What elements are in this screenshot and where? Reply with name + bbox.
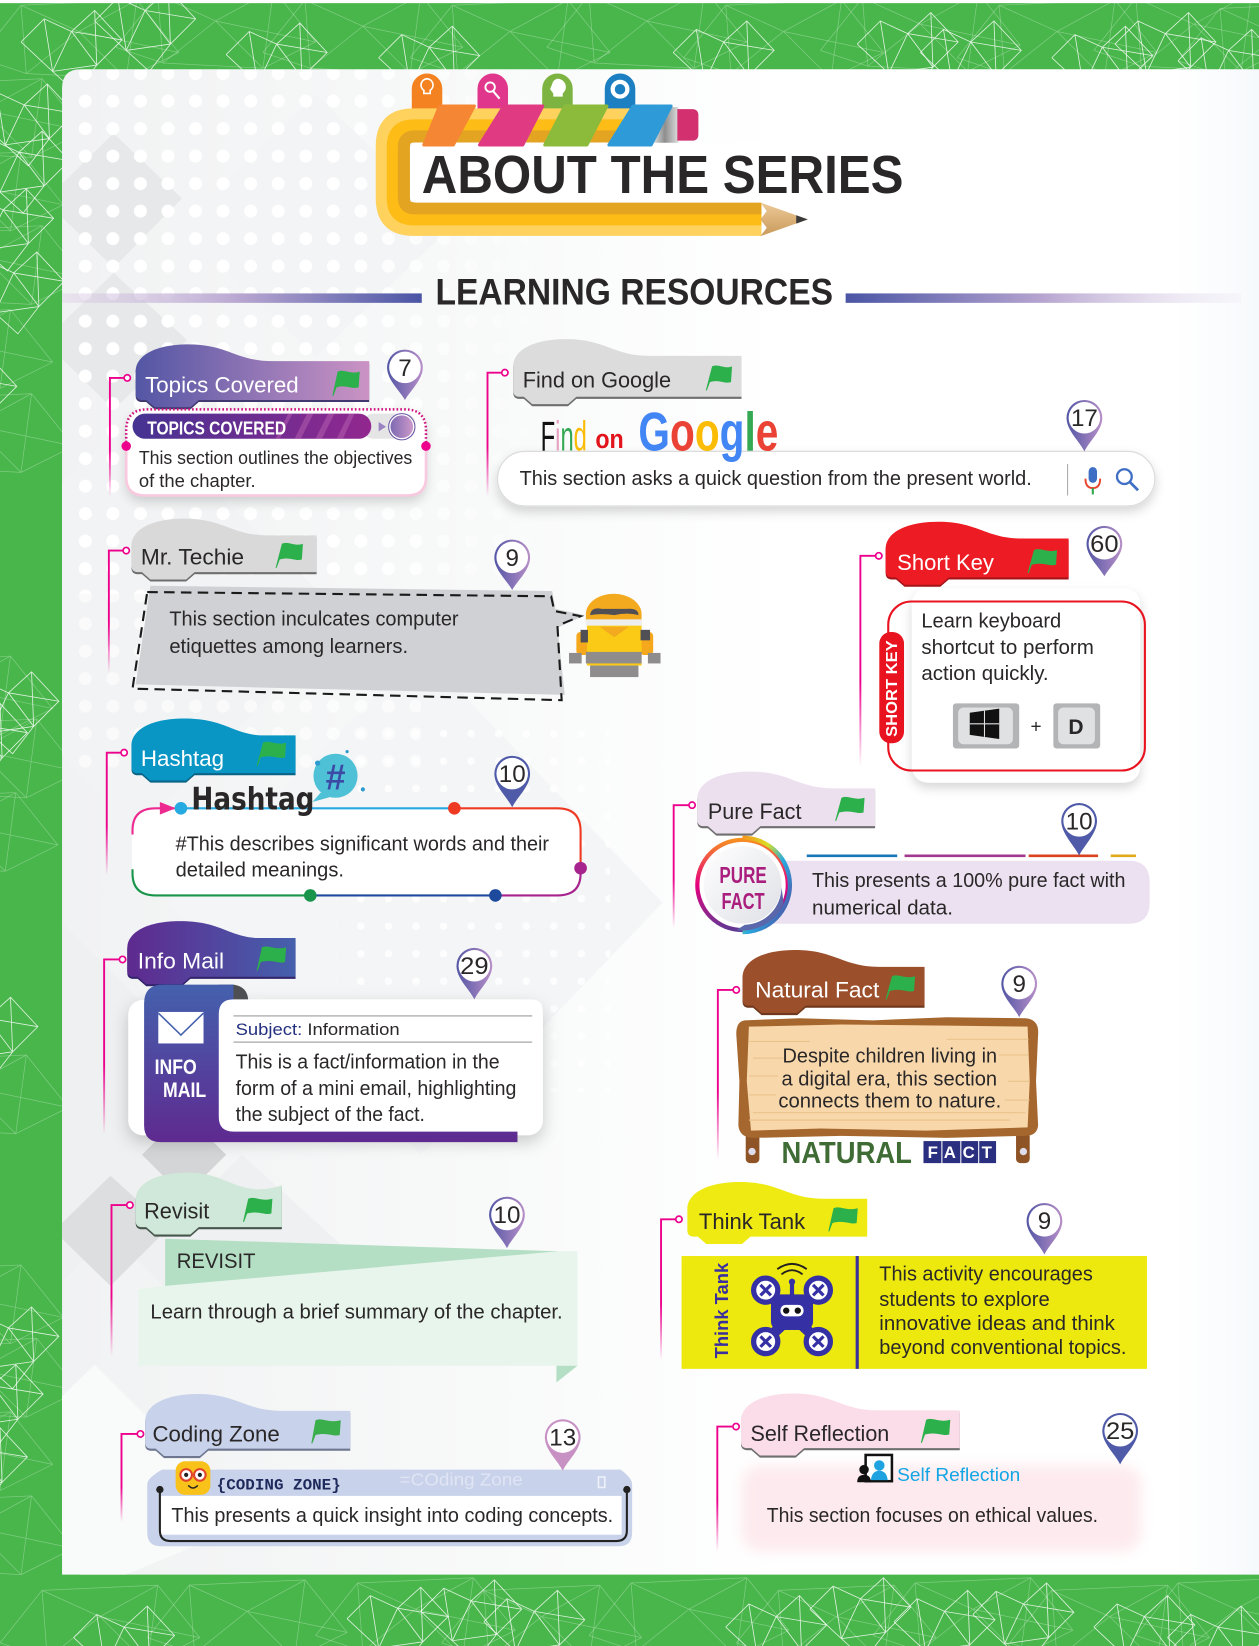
- title bar: TOPICS COVERED: [147, 419, 286, 440]
- find on google logo: on: [595, 424, 624, 454]
- pin 60: 60: [1090, 531, 1119, 558]
- self reflection logo: Self Reflection: [897, 1465, 1020, 1486]
- connector: [860, 553, 882, 766]
- tab: [131, 719, 296, 783]
- find on google logo: Find: [541, 412, 587, 459]
- heading: learning resources: [62, 271, 1241, 312]
- panel: coding zone: [121, 1394, 632, 1546]
- title: pencil banner: [382, 73, 915, 236]
- icon tabs above the pencil: [412, 73, 635, 111]
- tab: Think Tank: [699, 1209, 806, 1234]
- mail card: the subject of the fact.: [236, 1104, 425, 1126]
- find on google logo: Google: [638, 401, 778, 462]
- panel: find on google: [488, 339, 1155, 506]
- connector: [104, 956, 126, 1135]
- tab: [145, 1394, 350, 1458]
- top white strip: [0, 0, 1259, 3]
- pin 13: [545, 1419, 581, 1471]
- tab: Topics Covered: [145, 373, 299, 398]
- content box: [121, 409, 431, 497]
- code frame: =COding Zone: [400, 1469, 523, 1489]
- pin 10: [489, 1197, 525, 1248]
- code frame: {CODING ZONE}: [217, 1477, 341, 1495]
- coloured rule segments: [807, 854, 1136, 857]
- sign posts: [746, 1132, 1030, 1163]
- pin 9: [1027, 1203, 1062, 1254]
- callout box: This section inculcates computer: [169, 609, 459, 631]
- pin 7: 7: [398, 355, 412, 382]
- pure fact badge: PURE: [719, 862, 767, 888]
- heading: learning resources: LEARNING RESOURCES: [435, 271, 833, 312]
- background diamonds and dots: [62, 69, 1115, 1575]
- panel: mr. techie: [109, 519, 661, 700]
- connector: [674, 802, 695, 928]
- wooden sign: [736, 1017, 1038, 1163]
- mail card: Subject: Information: [236, 1020, 400, 1039]
- keyboard keys: [953, 703, 1100, 748]
- panel: topics covered: [110, 344, 431, 497]
- pin 29: 29: [460, 953, 489, 980]
- search bar: [497, 451, 1155, 506]
- description: This section focuses on ethical values.: [767, 1505, 1098, 1527]
- tab: Coding Zone: [153, 1421, 280, 1446]
- pin 17: 17: [1071, 405, 1098, 432]
- panel: pure fact: [674, 772, 1150, 932]
- summary box: Learn through a brief summary of the chapter.: [150, 1301, 563, 1323]
- pin 10: [494, 756, 530, 807]
- activity box: [682, 1256, 1147, 1369]
- coloured ribbons: [424, 106, 671, 145]
- icon: magnifier: [1117, 469, 1138, 490]
- panel: hashtag: [107, 719, 587, 902]
- natural fact logo: NATURAL: [781, 1136, 912, 1170]
- hashtag logo: #: [326, 757, 346, 797]
- tab: Pure Fact: [708, 799, 801, 824]
- hashtag logo: Hashtag: [191, 781, 314, 817]
- pencil tip: [760, 203, 808, 236]
- pin 9: 9: [1012, 971, 1026, 998]
- tab: [131, 519, 317, 582]
- pin 9: 9: [505, 545, 519, 572]
- keyboard keys: +: [1030, 717, 1042, 738]
- icon: coder face: [176, 1461, 210, 1495]
- tab: Mr. Techie: [141, 545, 244, 570]
- pure fact badge: [695, 838, 790, 932]
- natural fact logo: [781, 1136, 996, 1170]
- activity box: students to explore: [879, 1289, 1050, 1311]
- panel: short key: [860, 522, 1145, 783]
- search bar: This section asks a quick question from the present world.: [520, 468, 1032, 490]
- pin 9: 9: [1038, 1208, 1051, 1235]
- pin 9: [1001, 966, 1037, 1017]
- pin 9: [494, 540, 530, 590]
- pin 25: [1102, 1413, 1138, 1464]
- vertical label: [879, 632, 904, 743]
- tab: [741, 1394, 960, 1458]
- connector: [488, 370, 508, 497]
- tab: Find on Google: [523, 367, 671, 392]
- callout box: [133, 586, 585, 700]
- connector: [110, 375, 130, 497]
- activity box: Think Tank: [712, 1262, 733, 1358]
- tab: [743, 950, 925, 1015]
- panel: info mail: [104, 921, 543, 1142]
- tab: Natural Fact: [755, 977, 879, 1002]
- content card: Learn keyboard: [921, 611, 1061, 633]
- mail card: form of a mini email, highlighting: [236, 1078, 516, 1100]
- icon: envelope: [158, 1012, 204, 1043]
- panel: self reflection: [717, 1394, 1141, 1552]
- keyboard keys: D: [1068, 716, 1084, 739]
- tab: Short Key: [897, 550, 994, 575]
- content box: This section outlines the objectives: [139, 447, 412, 468]
- mail card: [128, 985, 543, 1142]
- code frame: This presents a quick insight into coding concepts.: [171, 1505, 613, 1527]
- summary box: REVISIT: [177, 1250, 256, 1273]
- pill: This presents a 100% pure fact with: [812, 870, 1125, 892]
- tab: [697, 772, 875, 836]
- wooden sign: connects them to nature.: [778, 1090, 1001, 1112]
- self reflection logo: [857, 1455, 1020, 1486]
- pencil eraser: [651, 107, 698, 143]
- tab: Hashtag: [141, 746, 224, 771]
- connector: [717, 1423, 739, 1552]
- connector: [661, 1216, 682, 1360]
- icon: microphone: [1085, 467, 1100, 494]
- tab: [687, 1182, 867, 1244]
- vertical label: SHORT KEY: [884, 640, 901, 737]
- mail card: MAIL: [163, 1079, 206, 1102]
- mail card: This is a fact/information in the: [236, 1052, 500, 1074]
- tab: [886, 522, 1069, 587]
- pin 60: [1087, 526, 1122, 576]
- title bar: [133, 414, 415, 440]
- pin 25: 25: [1106, 1418, 1134, 1445]
- pill: numerical data.: [812, 897, 953, 919]
- tab: [513, 339, 742, 406]
- title text: ABOUT THE SERIES: [422, 145, 903, 205]
- tab: Info Mail: [138, 948, 224, 973]
- connector: [109, 547, 129, 673]
- summary box: [138, 1239, 577, 1383]
- wooden sign: a digital era, this section: [781, 1068, 997, 1090]
- outlined card: #This describes significant words and their: [176, 833, 549, 855]
- pin 17: [1067, 400, 1102, 451]
- tab: [127, 921, 296, 986]
- wooden sign: Despite children living in: [783, 1045, 997, 1067]
- tab: Revisit: [144, 1199, 209, 1224]
- activity box: innovative ideas and think: [879, 1313, 1115, 1335]
- icon: robot: [569, 594, 661, 677]
- pure fact badge: FACT: [722, 888, 765, 914]
- code frame: [147, 1461, 632, 1546]
- content box: of the chapter.: [139, 470, 256, 491]
- outlined card: detailed meanings.: [176, 860, 344, 882]
- panel: revisit: [111, 1173, 577, 1383]
- tab: Self Reflection: [750, 1421, 889, 1446]
- pencil body: [382, 114, 762, 230]
- pin 10: 10: [1066, 808, 1093, 835]
- pin 10: 10: [499, 761, 526, 788]
- connector: [107, 750, 127, 875]
- content card: shortcut to perform: [921, 637, 1094, 659]
- inner title backing: [410, 143, 915, 203]
- connector: [121, 1431, 144, 1522]
- content card: action quickly.: [921, 663, 1049, 685]
- brush background: [742, 1465, 1141, 1552]
- connector: [111, 1202, 133, 1356]
- hashtag logo: [191, 750, 365, 817]
- pin 29: [456, 948, 492, 999]
- activity box: This activity encourages: [879, 1264, 1093, 1286]
- pin 13: 13: [549, 1425, 576, 1451]
- natural fact logo: FACT: [928, 1143, 993, 1162]
- mail card: INFO: [155, 1056, 197, 1079]
- find on google logo: [541, 401, 778, 462]
- pin 7: [387, 350, 423, 400]
- pill: [757, 854, 1150, 924]
- panel: think tank: [661, 1182, 1147, 1369]
- pin 10: [1061, 803, 1097, 856]
- outlined card: [132, 802, 587, 902]
- pin 10: 10: [494, 1202, 520, 1229]
- callout box: etiquettes among learners.: [169, 636, 408, 658]
- content card: [879, 588, 1145, 783]
- tab: [136, 1173, 282, 1237]
- icon: drone robot: [754, 1264, 830, 1354]
- connector: [718, 987, 739, 1160]
- panel: natural fact: [718, 950, 1038, 1170]
- tab: [136, 344, 369, 409]
- activity box: beyond conventional topics.: [879, 1337, 1126, 1359]
